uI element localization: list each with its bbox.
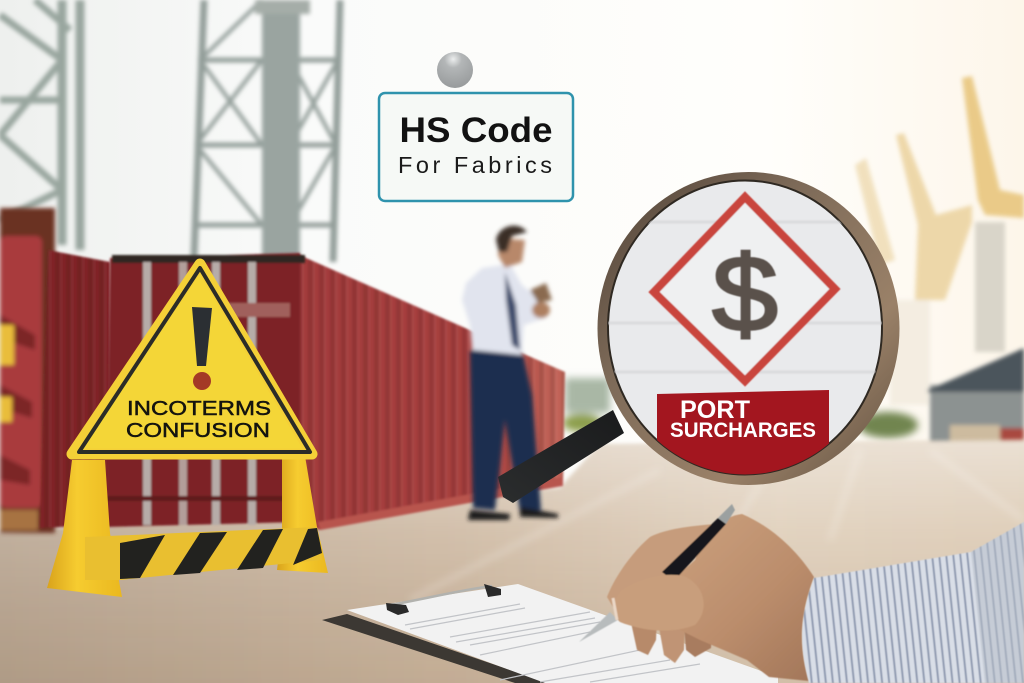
man standing with documents xyxy=(462,226,558,520)
wooden quay floor xyxy=(0,440,1024,683)
stand right leg xyxy=(277,456,328,573)
document text lines xyxy=(405,604,700,682)
banner text: PORT xyxy=(680,396,750,424)
long red container side xyxy=(297,254,565,530)
placard subtitle: For Fabrics xyxy=(398,152,552,178)
pen tip xyxy=(579,612,618,642)
handle xyxy=(498,410,624,503)
pen clip end xyxy=(718,504,735,524)
dark red container xyxy=(40,250,110,528)
placard panel xyxy=(379,93,573,201)
back of hand xyxy=(640,514,814,681)
sign text: INCOTERMS xyxy=(127,397,271,420)
warning triangle xyxy=(72,264,312,454)
left steel tower xyxy=(0,0,80,250)
distant port cranes xyxy=(855,76,1024,405)
lens xyxy=(608,180,882,474)
rim xyxy=(598,172,900,485)
pen barrel xyxy=(662,518,726,581)
surcharge diamond xyxy=(654,197,835,381)
stacked containers far left xyxy=(0,208,55,533)
distant terminal building xyxy=(928,348,1024,462)
triangle inner border xyxy=(79,268,310,452)
banner text xyxy=(670,396,816,442)
dollar symbol: $ xyxy=(712,233,778,354)
distant greenery xyxy=(562,378,918,438)
paper clip xyxy=(386,584,501,615)
stand left leg xyxy=(47,460,122,597)
red banner xyxy=(657,390,829,480)
HS code placard xyxy=(379,52,573,201)
thumb xyxy=(614,575,704,631)
writing hand holding pen xyxy=(579,504,814,681)
yellow warning sign on stand: CONFUSION xyxy=(126,419,270,442)
hazard striped bar xyxy=(85,527,322,580)
paper sheet xyxy=(347,584,778,683)
striped shirt cuff xyxy=(802,522,1024,683)
central steel tower xyxy=(194,0,340,262)
clipboard with document xyxy=(322,584,778,683)
curled fingers xyxy=(630,618,712,663)
pin xyxy=(437,52,473,88)
index finger xyxy=(607,524,716,612)
clipboard board xyxy=(322,614,548,683)
placard title: HS Code xyxy=(400,111,552,150)
red container doors xyxy=(106,253,305,527)
exclamation mark xyxy=(192,307,212,390)
thumbnail xyxy=(613,598,617,620)
banner text: SURCHARGES xyxy=(670,419,816,442)
magnifying glass xyxy=(498,172,900,503)
yellow warning sign on stand xyxy=(47,264,328,597)
